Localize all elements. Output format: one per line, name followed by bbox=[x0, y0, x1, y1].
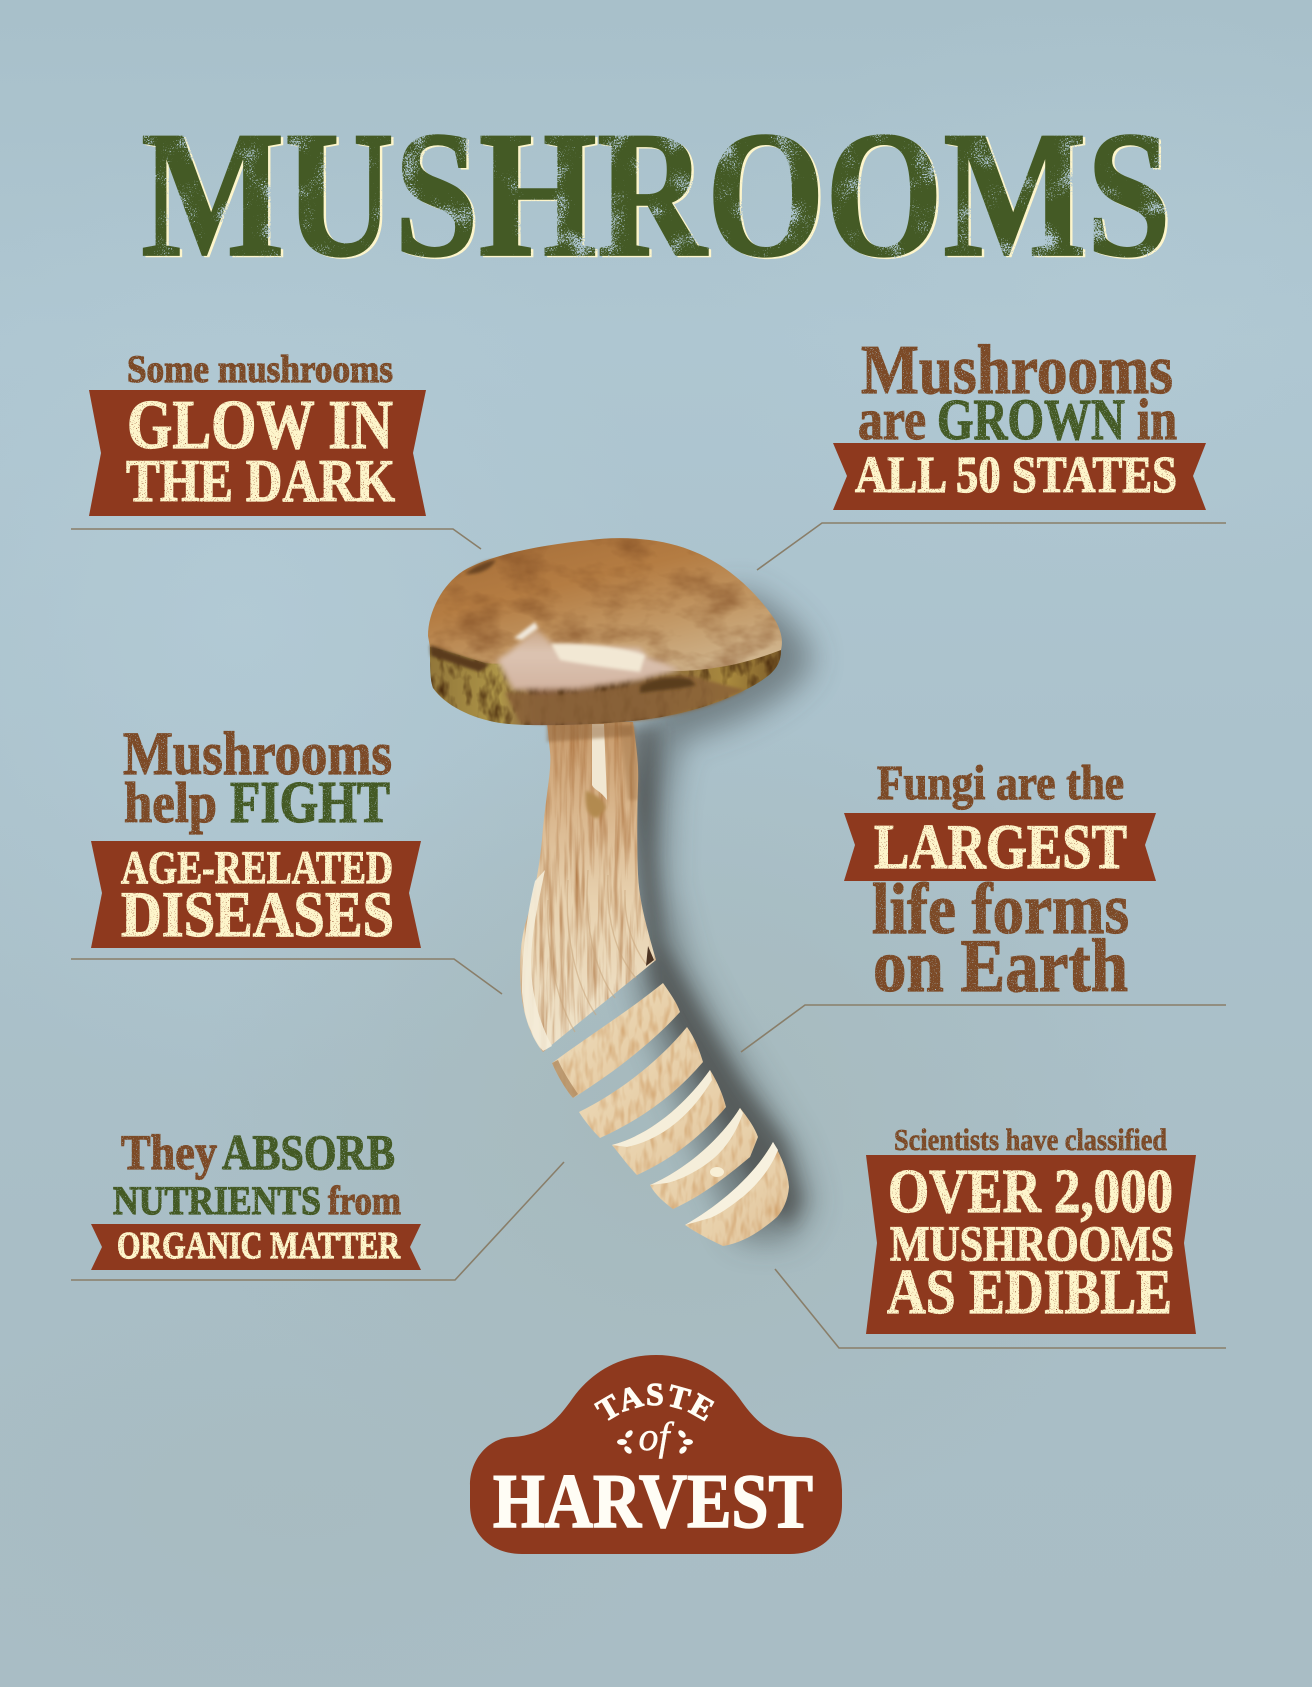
ribbon bbox=[91, 1224, 421, 1270]
lead-in text bbox=[113, 1124, 401, 1223]
slice 4 bbox=[650, 1108, 758, 1209]
logo word: taste: TASTE bbox=[594, 1383, 714, 1422]
stem curved grain bbox=[548, 870, 646, 1032]
callout: fight age-related diseases bbox=[71, 721, 502, 994]
lead-in text: Fungi are the bbox=[877, 755, 1124, 810]
white flesh patch bbox=[551, 644, 645, 672]
lead-in text: Mushrooms bbox=[123, 721, 392, 788]
callout: largest life forms bbox=[741, 755, 1226, 1052]
leader line bbox=[741, 1005, 1226, 1052]
highlight text bbox=[126, 387, 395, 514]
callout: absorb nutrients bbox=[71, 1124, 564, 1280]
slice 2 bbox=[579, 1027, 703, 1138]
highlight text: AGE-RELATED bbox=[121, 842, 393, 894]
lead-in text bbox=[123, 721, 392, 835]
lead-in text: Scientists have classified bbox=[894, 1122, 1167, 1157]
lead-in text: They bbox=[121, 1124, 217, 1180]
mushroom photo bbox=[428, 538, 812, 1246]
lead-in text: Mushrooms bbox=[861, 332, 1173, 409]
lead-in text: are bbox=[858, 387, 926, 452]
highlight text: AS EDIBLE bbox=[887, 1256, 1172, 1327]
logo word: harvest: HARVEST bbox=[493, 1458, 813, 1544]
lead-in text bbox=[858, 332, 1177, 452]
slice 1 bbox=[552, 983, 680, 1098]
logo word: of: of bbox=[638, 1414, 674, 1459]
highlight text: THE DARK bbox=[126, 448, 395, 514]
lead-in text: from bbox=[328, 1178, 401, 1223]
closing text: on Earth bbox=[873, 925, 1128, 1008]
leader line bbox=[71, 529, 481, 549]
stem pale edge bbox=[522, 870, 552, 1051]
ribbon bbox=[91, 841, 421, 948]
icon: right leaves bbox=[677, 1429, 693, 1455]
slice 3 bbox=[612, 1070, 726, 1175]
mushroom cast shadow bbox=[620, 590, 812, 1240]
highlight text: DISEASES bbox=[121, 879, 394, 951]
lead-in text: GROWN bbox=[937, 387, 1125, 452]
slice 5 bbox=[685, 1142, 789, 1246]
lead-in text: in bbox=[1137, 387, 1177, 452]
highlight text bbox=[121, 842, 394, 951]
lead-in text: Some mushrooms bbox=[127, 348, 393, 391]
lead-in text: FIGHT bbox=[230, 769, 390, 835]
leader line bbox=[71, 1162, 564, 1280]
closing text bbox=[872, 869, 1129, 1008]
callout: over 2,000 edible bbox=[775, 1122, 1226, 1348]
ribbon bbox=[833, 443, 1206, 510]
bruised pink patch bbox=[497, 628, 680, 690]
mushroom cap bbox=[428, 538, 782, 725]
stem bbox=[520, 722, 656, 1052]
highlight text bbox=[887, 1158, 1174, 1327]
logo: Taste of Harvest bbox=[470, 1355, 842, 1554]
ribbon bbox=[89, 390, 426, 516]
highlight text: OVER 2,000 bbox=[888, 1158, 1173, 1226]
leader line bbox=[775, 1269, 1226, 1348]
leader line bbox=[71, 959, 502, 994]
leader line bbox=[757, 523, 1226, 570]
highlight text: ORGANIC MATTER bbox=[117, 1225, 400, 1267]
dark brown cap band bbox=[505, 676, 745, 724]
highlight text: MUSHROOMS bbox=[890, 1215, 1174, 1271]
highlight text: GLOW IN bbox=[127, 387, 393, 464]
lead-in text: ABSORB bbox=[222, 1124, 395, 1180]
logo badge bbox=[470, 1355, 842, 1554]
callout: grown in all 50 states bbox=[757, 332, 1226, 570]
callout: glow in the dark bbox=[71, 348, 481, 549]
ribbon bbox=[866, 1155, 1196, 1334]
highlight text: LARGEST bbox=[874, 812, 1127, 882]
closing text: life forms bbox=[872, 869, 1129, 949]
ribbon bbox=[844, 813, 1156, 881]
lead-in text: help bbox=[124, 772, 217, 835]
icon: left leaves bbox=[617, 1429, 634, 1455]
highlight text: ALL 50 STATES bbox=[855, 447, 1177, 504]
lead-in text: NUTRIENTS bbox=[113, 1178, 321, 1223]
